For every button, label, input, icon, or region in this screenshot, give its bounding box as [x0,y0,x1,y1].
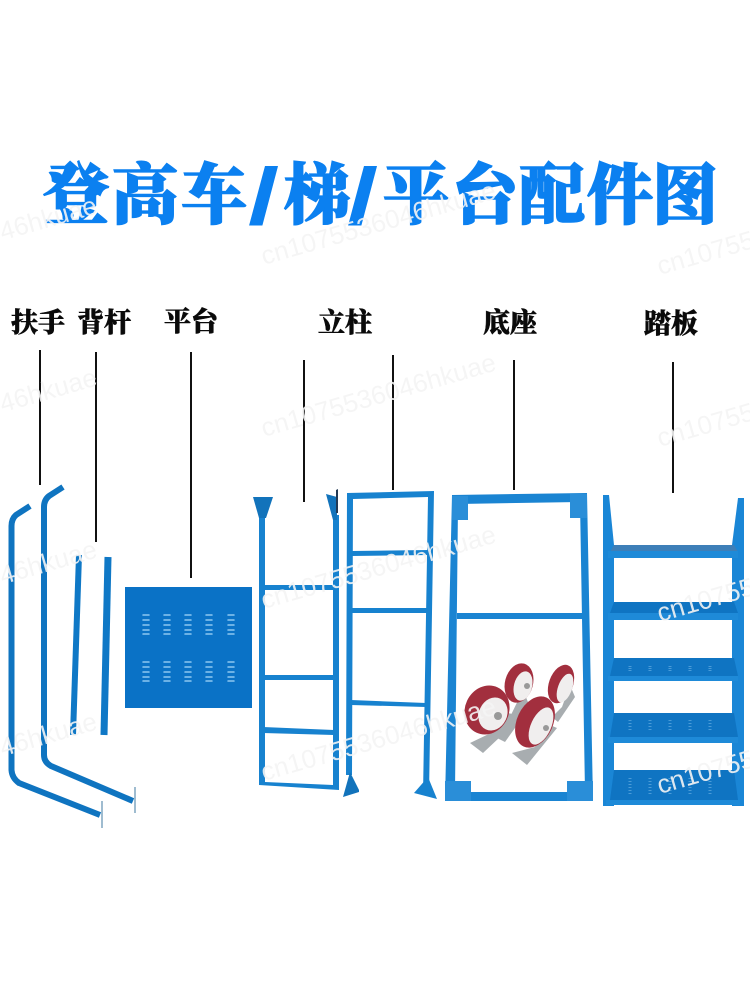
side posts [603,495,614,806]
label: handrail: 扶手 [11,307,65,338]
watermarks on background: cn1075536046hkuae [257,347,499,443]
title: 梯 [284,160,350,233]
handrail right [44,487,135,813]
base frame [445,493,593,801]
stair pedals [603,495,744,806]
watermarks on background [0,175,750,802]
watermarks on background: cn1075536046hkuae [257,175,499,271]
handrail left [12,506,102,828]
watermarks over parts: cn1075536046hkuae [257,175,499,271]
watermarks on background: cn1075536046hkuae [257,519,499,615]
label: platform: 平台 [164,307,220,337]
louvre slots [143,615,234,681]
caster back right [543,661,579,722]
watermarks over parts: cn1075536046hkuae [257,691,499,787]
caster front right [507,690,563,765]
watermarks over parts: cn1075536046hkuae [257,347,499,443]
platform panel [125,587,252,708]
tread 4 [608,713,738,743]
title: 登高车 [43,159,247,233]
column frame left [253,489,339,790]
back bar right [104,557,108,735]
tread 3 [608,658,738,681]
title: / [347,152,378,241]
label: column: 立柱 [318,308,372,338]
leader lines [40,350,673,578]
casters [456,660,579,765]
watermarks over parts [0,175,750,802]
caster front left [456,678,518,753]
title: 平台配件图 [383,160,718,233]
tread 2 [608,602,738,620]
label: base: 底座 [483,307,539,338]
back bar left [73,555,79,735]
label: pedal: 踏板 [644,309,698,339]
tread 5 [606,770,740,805]
label: back bar: 背杆 [77,307,131,338]
title: / [248,152,279,241]
tread 1 [608,545,738,558]
caster back left [497,660,538,742]
handrails [12,487,135,828]
watermarks over parts: cn1075536046hkuae [257,519,499,615]
back bars [73,555,108,735]
title [43,152,718,241]
watermarks on background: cn1075536046hkuae [257,691,499,787]
column frame right [343,491,437,799]
labels [11,307,698,339]
